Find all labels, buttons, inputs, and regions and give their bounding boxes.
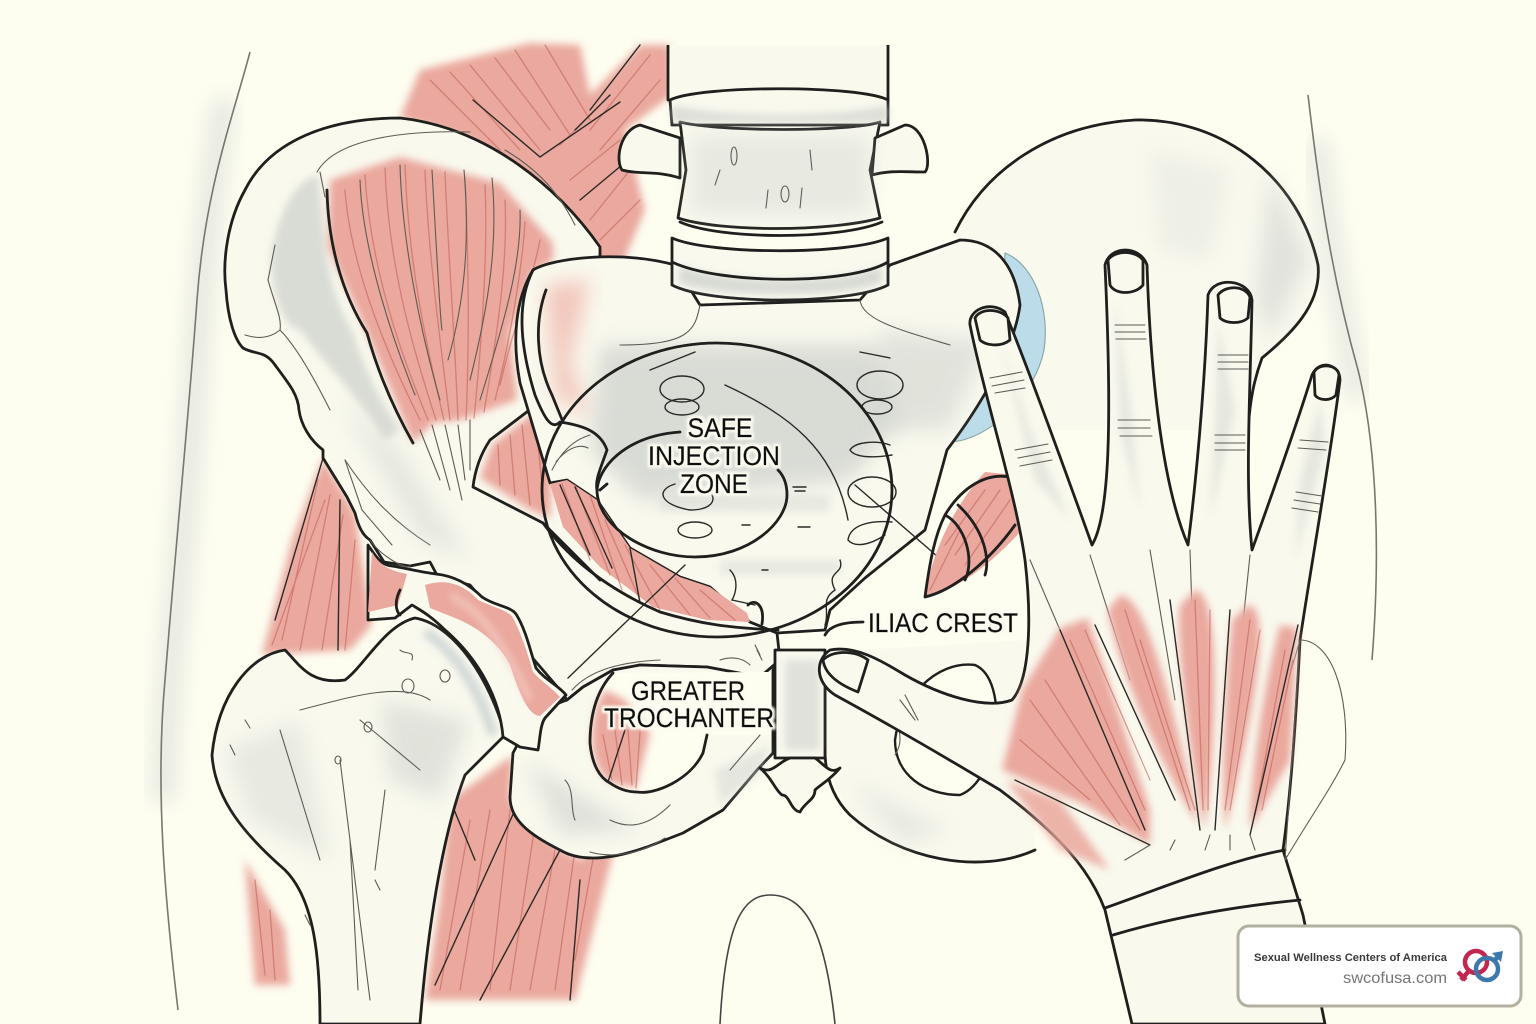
label: safe injection zone: INJECTION <box>648 441 780 471</box>
badge: brand card <box>1238 926 1521 1006</box>
muscle: piriformis inside circle <box>543 480 778 630</box>
bone: right lower pelvis <box>823 640 1035 862</box>
leader lines for labels <box>568 485 945 678</box>
bone: femur head and shaft <box>212 618 505 1024</box>
bone: right ilium behind hand <box>955 120 1318 430</box>
bone: coccyx <box>760 650 840 812</box>
label: iliac crest: ILIAC CREST <box>868 608 1018 638</box>
bone: left lower pelvis and pubic ramus <box>510 645 780 858</box>
sacral foramina details <box>650 352 903 625</box>
brand url: swcofusa.com <box>1343 970 1447 987</box>
muscle: gluteus on ilium <box>327 157 553 500</box>
muscle: right gluteal fan beside index finger <box>925 472 1022 597</box>
pelvis right side hip outline <box>1285 640 1346 860</box>
bone: sacrum <box>516 240 1020 633</box>
icon: fingernails <box>823 252 1339 692</box>
hand over the right side <box>819 250 1340 1024</box>
label: greater trochanter <box>604 676 774 733</box>
finger creases and tendons <box>900 325 1328 760</box>
icon: gender symbols logo <box>1458 951 1503 980</box>
bone: left ilium <box>225 118 780 700</box>
cartilage: hip joint pink bands <box>368 545 566 750</box>
label: safe injection zone <box>648 413 780 499</box>
muscles: back and thigh muscle layer <box>245 43 672 1000</box>
muscle: gluteus minimus triangle <box>473 402 600 580</box>
label: safe injection zone: SAFE <box>688 413 752 443</box>
cartilage: blue sacroiliac patch <box>950 253 1045 442</box>
brand name: Sexual Wellness Centers of America <box>1254 952 1448 964</box>
bone: spine vertebrae <box>619 45 928 300</box>
label: greater trochanter: GREATER <box>631 676 745 706</box>
label: greater trochanter: TROCHANTER <box>604 703 774 733</box>
label: safe injection zone: ZONE <box>680 469 748 499</box>
body silhouette outline <box>161 52 1376 1024</box>
callout: safe injection zone circle <box>542 343 892 637</box>
wrist lines <box>1105 850 1300 935</box>
muscle: back of hand interosseous muscles <box>1002 590 1298 870</box>
